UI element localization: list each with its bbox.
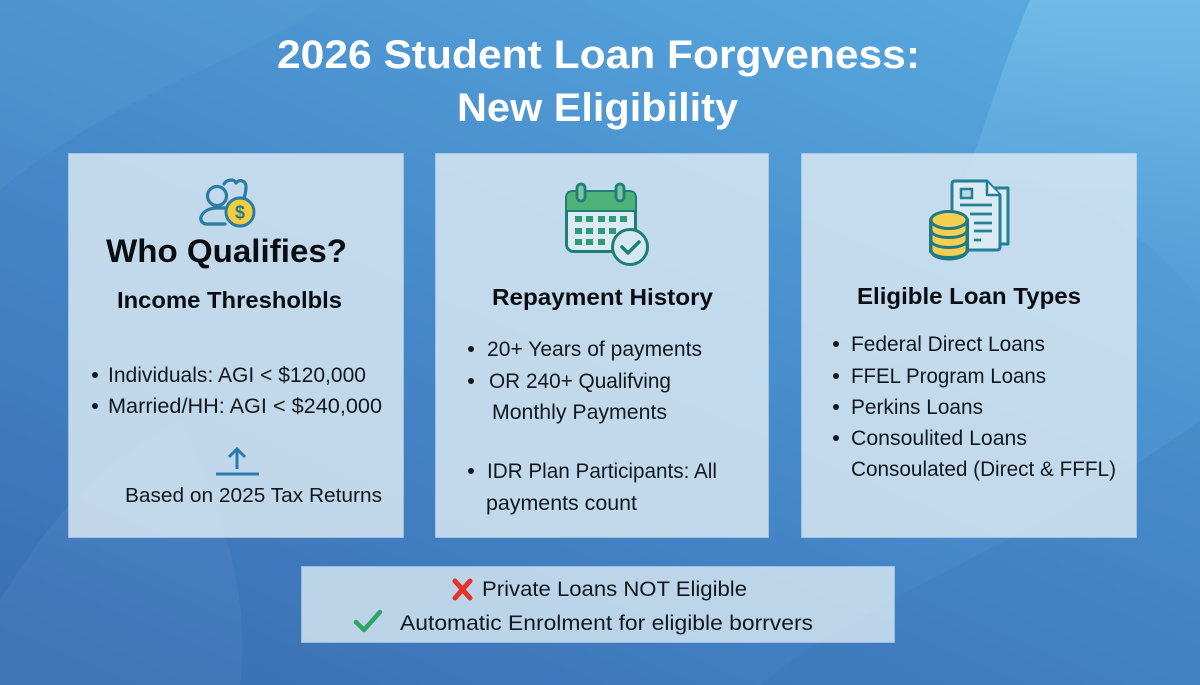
income list <box>92 364 382 418</box>
loan list: FFEL Program Loans <box>851 365 1046 388</box>
icon: green check <box>356 612 380 630</box>
title: New Eligibility <box>457 86 739 130</box>
icon: documents and coin stack <box>930 181 1008 259</box>
callout: notes <box>302 566 894 642</box>
repayment list: Monthly Payments <box>492 401 667 424</box>
note: tax returns: Based on 2025 Tax Returns <box>125 485 382 507</box>
title: 2026 Student Loan Forgveness: <box>277 33 920 77</box>
note: automatic enrolment: Automatic Enrolment for eligible borrvers <box>400 612 813 635</box>
panel: who qualifies <box>68 154 404 538</box>
repayment list: IDR Plan Participants: All <box>487 460 717 483</box>
icon: up arrow <box>216 449 259 474</box>
loan list: Consoulated (Direct & FFFL) <box>851 458 1116 481</box>
loan list: Consoulited Loans <box>851 427 1027 450</box>
loan list: Perkins Loans <box>851 396 983 419</box>
loan list <box>833 333 1116 481</box>
repayment list: OR 240+ Qualifving <box>489 370 671 393</box>
income list: Married/HH: AGI < $240,000 <box>108 395 382 418</box>
note: private loans: Private Loans NOT Eligible <box>482 578 747 601</box>
loan list: Federal Direct Loans <box>851 333 1045 356</box>
icon: red cross <box>455 581 470 598</box>
panel: eligible loan types <box>802 154 1136 538</box>
income list: Individuals: AGI < $120,000 <box>108 364 366 387</box>
heading: repayment history: Repayment History <box>492 284 713 310</box>
panel: repayment history <box>436 154 768 538</box>
repayment list <box>468 338 717 515</box>
subheading: income thresholds: Income Thresholbls <box>117 287 342 313</box>
icon: person with dollar coin: $ <box>235 202 245 222</box>
repayment list: payments count <box>486 492 637 515</box>
title <box>277 33 920 130</box>
icon: person with dollar coin <box>201 180 254 226</box>
icon: calendar with check <box>566 184 648 264</box>
heading: who qualifies: Who Qualifies? <box>106 233 347 269</box>
heading: eligible loan types: Eligible Loan Types <box>857 283 1081 309</box>
repayment list: 20+ Years of payments <box>487 338 702 361</box>
